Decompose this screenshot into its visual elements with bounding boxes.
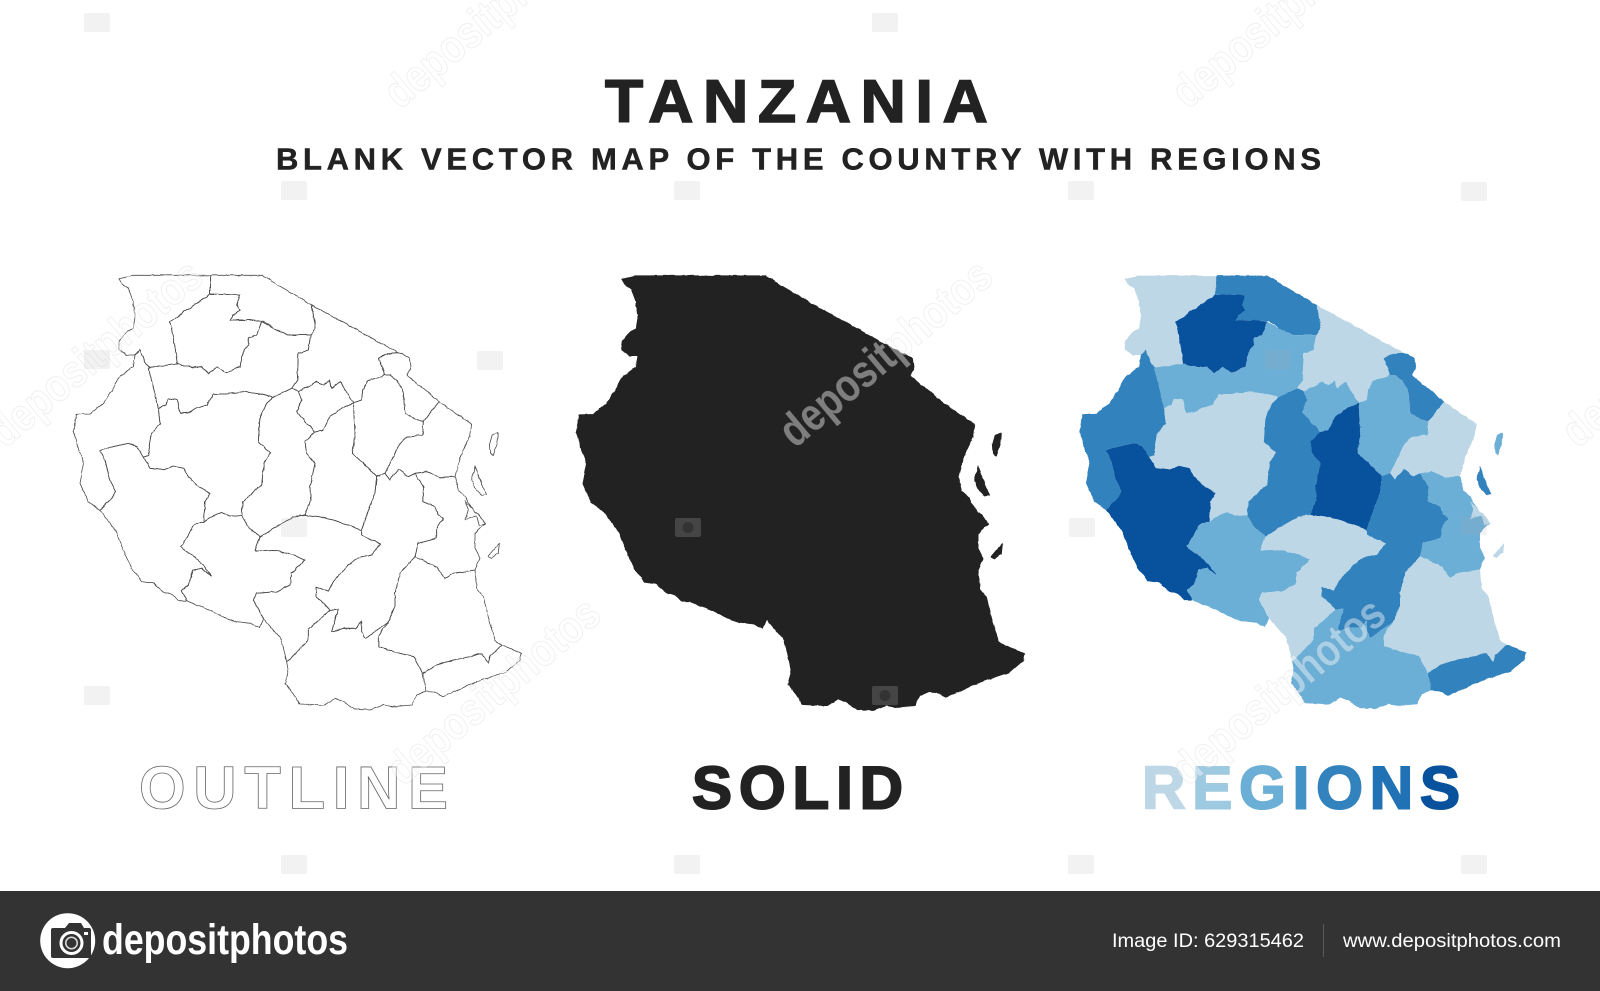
region: central west (1149, 392, 1279, 521)
watermark text: depositphotos (376, 586, 610, 795)
region: central capital (1310, 403, 1382, 531)
region: coastal city (1470, 500, 1490, 525)
region: south (1290, 608, 1431, 709)
watermark text: depositphotos (1161, 586, 1395, 795)
watermark camera icons (84, 13, 1487, 874)
label: solid: SOLID (692, 754, 903, 822)
island: Mafia (1493, 543, 1504, 558)
island: Unguja (1477, 466, 1492, 495)
map: solid version (576, 276, 1025, 710)
region: north centre band (1154, 322, 1316, 413)
map: coloured regions version (1079, 276, 1527, 709)
region: north-east coast (1390, 402, 1477, 480)
watermark text: depositphotos (768, 248, 1002, 457)
region: south-west lake (1106, 443, 1217, 600)
region: south-west highlands (1186, 512, 1310, 627)
region: south central (1259, 515, 1386, 661)
title: TANZANIA (605, 68, 988, 135)
website url: www.depositphotos.com (1342, 930, 1561, 952)
region: west lake (1079, 350, 1166, 510)
logo wordmark: depositphotos (102, 916, 348, 964)
region: north-east narrow (1384, 353, 1444, 422)
region: south-east inland (1384, 556, 1507, 673)
icon: depositphotos camera logo (40, 913, 95, 968)
region: south-east coast (1428, 644, 1527, 696)
label: outline: OUTLINE (139, 754, 448, 822)
region: north-east inland (1358, 375, 1428, 476)
image id: Image ID: 629315462 (1112, 930, 1304, 952)
map: outline version (73, 275, 522, 710)
label: regions: REGIONS (1142, 754, 1460, 822)
region: north lake (1216, 276, 1321, 335)
region: north-west (1124, 276, 1216, 367)
footer bar (0, 891, 1600, 991)
region: north-east (1297, 305, 1403, 403)
region: east coast (1420, 471, 1490, 578)
region: small central north (1302, 380, 1359, 432)
region: east central (1321, 469, 1448, 638)
subtitle: BLANK VECTOR MAP OF THE COUNTRY WITH REGIONS (276, 142, 1321, 176)
region: central tall (1247, 388, 1320, 537)
island: Pemba (1494, 433, 1503, 455)
region: lake south shore (1176, 294, 1267, 373)
